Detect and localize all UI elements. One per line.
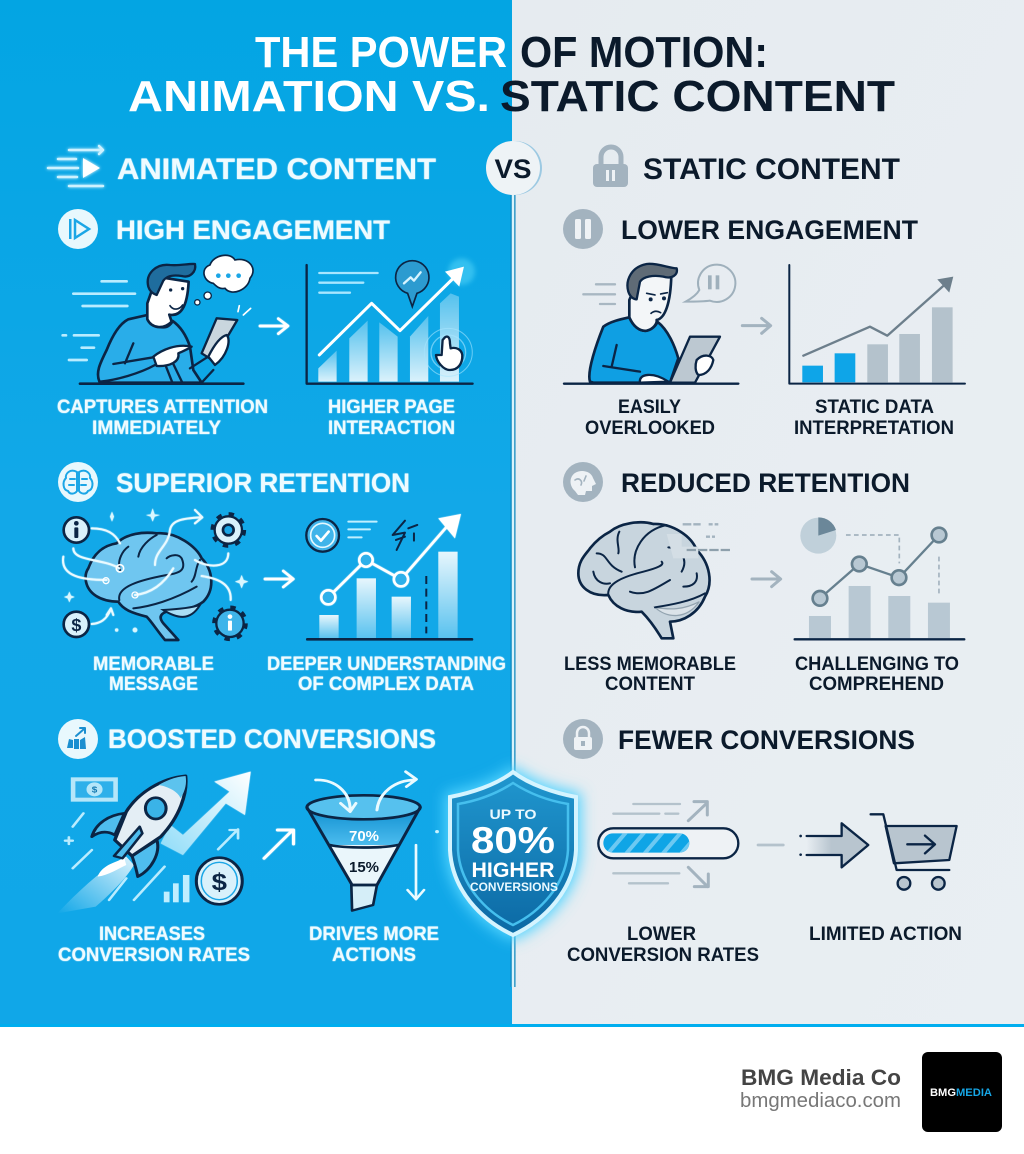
hair bbox=[627, 264, 677, 299]
dashed guides bbox=[846, 535, 939, 597]
arrow bbox=[742, 318, 771, 333]
chart: page interaction bbox=[307, 258, 475, 384]
caption: captures attention bbox=[57, 396, 268, 439]
chart: deeper understanding bbox=[306, 514, 472, 639]
callout: 80% shield bbox=[450, 772, 576, 935]
rocket body bbox=[92, 813, 124, 837]
rising arrow bbox=[161, 772, 251, 855]
caption: increases conversion rates: INCREASES bbox=[99, 923, 205, 945]
caption: higher page interaction bbox=[328, 396, 455, 439]
pointing hand bbox=[153, 346, 192, 366]
section heading: high engagement bbox=[58, 209, 391, 249]
coin bbox=[196, 858, 242, 904]
panel: animated background bbox=[0, 0, 512, 1025]
caption: memorable message: MEMORABLE bbox=[93, 653, 214, 675]
phone bbox=[202, 318, 237, 361]
dollar badge: $ bbox=[71, 615, 81, 635]
illustration: bored person with tablet bbox=[564, 264, 738, 384]
icon: padlock badge bbox=[563, 719, 603, 759]
hand cursor bbox=[436, 337, 462, 370]
chart: static data bbox=[789, 265, 965, 384]
block arrow bbox=[807, 823, 868, 867]
illustration: progress bar bbox=[598, 802, 738, 887]
caption: memorable message: MESSAGE bbox=[109, 673, 198, 695]
cursor rings bbox=[424, 328, 472, 376]
trend line bbox=[803, 281, 949, 356]
title: STATIC CONTENT bbox=[500, 72, 895, 121]
caption: less memorable content: LESS MEMORABLE bbox=[564, 653, 736, 675]
footer brand text bbox=[740, 1065, 901, 1112]
section heading: fewer conversions bbox=[563, 719, 915, 759]
caption: deeper understanding: OF COMPLEX DATA bbox=[298, 673, 474, 695]
coin: $ bbox=[212, 870, 227, 896]
icon: growth badge bbox=[58, 719, 98, 759]
glow bbox=[448, 258, 475, 285]
check badge bbox=[306, 519, 339, 552]
section heading: lower engagement: LOWER ENGAGEMENT bbox=[621, 215, 918, 245]
scribble icon bbox=[393, 521, 417, 550]
section heading: lower engagement bbox=[563, 209, 918, 249]
neck and face bbox=[629, 275, 671, 331]
typing hand bbox=[640, 375, 668, 383]
callout: 80% shield: HIGHER bbox=[472, 859, 554, 882]
fading dashes bbox=[683, 521, 701, 528]
cart bbox=[886, 826, 957, 863]
fade lines bbox=[613, 804, 680, 883]
bars bbox=[319, 552, 458, 638]
caption: less memorable content: CONTENT bbox=[605, 673, 695, 695]
caption: deeper understanding bbox=[267, 653, 506, 695]
callout: 80% shield: UP TO bbox=[490, 806, 537, 822]
dash connector bbox=[758, 841, 783, 849]
arrow bbox=[752, 572, 781, 587]
section heading: superior retention bbox=[58, 462, 410, 502]
arrow bbox=[265, 571, 293, 587]
illustration: arrow into cart bbox=[799, 814, 957, 890]
icon: padlock bbox=[593, 147, 628, 187]
section heading: high engagement: HIGH ENGAGEMENT bbox=[116, 215, 391, 245]
column heading: animated content: ANIMATED CONTENT bbox=[117, 153, 436, 186]
chart: challenging to comprehend bbox=[795, 517, 964, 639]
footer brand text: BMG Media Co bbox=[741, 1065, 901, 1090]
illustration: person with phone bbox=[63, 255, 253, 384]
VS badge bbox=[486, 141, 542, 195]
caption: drives more actions: ACTIONS bbox=[332, 944, 416, 966]
icon: brain badge bbox=[58, 462, 98, 502]
hair bbox=[148, 264, 195, 295]
caption: static data interpretation bbox=[794, 396, 954, 439]
icon: speeding play bbox=[48, 146, 103, 186]
title: ANIMATION VS. bbox=[128, 72, 490, 121]
callout: 80% shield: CONVERSIONS bbox=[470, 880, 558, 894]
info badge bbox=[64, 517, 89, 543]
arrow bbox=[260, 319, 288, 334]
baseline bbox=[307, 635, 472, 643]
pause bubble bbox=[686, 265, 735, 302]
arm lines bbox=[100, 343, 213, 383]
pin icon bbox=[396, 261, 429, 307]
banknote bbox=[71, 777, 118, 802]
caption: lower conversion rates bbox=[567, 923, 759, 966]
desk line bbox=[80, 380, 243, 388]
trend line bbox=[321, 514, 461, 604]
tablet bbox=[670, 337, 720, 383]
caption: static data interpretation: INTERPRETATION bbox=[794, 417, 954, 439]
speed lines bbox=[583, 284, 615, 304]
bars bbox=[809, 586, 950, 638]
bar track bbox=[598, 828, 738, 858]
icon: head badge bbox=[563, 462, 603, 502]
gear icon bbox=[213, 514, 244, 546]
caption: increases conversion rates: CONVERSION RATES bbox=[58, 944, 250, 966]
footer logo: MEDIA bbox=[956, 1087, 992, 1099]
caption: static data interpretation: STATIC DATA bbox=[815, 396, 934, 418]
banknote: $ bbox=[92, 785, 98, 794]
VS badge: VS bbox=[494, 154, 532, 184]
caption: challenging to comprehend: COMPREHEND bbox=[809, 673, 944, 695]
funnel bbox=[307, 772, 439, 911]
axes bbox=[789, 265, 965, 384]
flame bbox=[57, 857, 134, 913]
caption: increases conversion rates bbox=[58, 923, 250, 966]
bars bbox=[318, 293, 459, 382]
dashed marker bbox=[423, 576, 429, 633]
neural paths bbox=[63, 510, 231, 624]
panel: static background bbox=[512, 0, 1024, 1025]
caption: higher page interaction: INTERACTION bbox=[328, 417, 455, 439]
title: THE POWER bbox=[255, 28, 507, 77]
arrow bbox=[264, 830, 294, 858]
section heading: reduced retention bbox=[563, 462, 910, 502]
gear info icon bbox=[214, 608, 246, 639]
sparkles bbox=[64, 508, 248, 632]
text lines bbox=[348, 522, 377, 537]
icon: pause circle bbox=[563, 209, 603, 249]
caption: memorable message bbox=[93, 653, 214, 695]
footer brand text: bmgmediaco.com bbox=[740, 1090, 901, 1112]
desk line bbox=[564, 380, 738, 387]
caption: captures attention: IMMEDIATELY bbox=[92, 417, 221, 439]
mini bars bbox=[164, 875, 189, 902]
section heading: reduced retention: REDUCED RETENTION bbox=[621, 468, 910, 498]
funnel: 15% bbox=[349, 859, 379, 876]
dollar badge bbox=[64, 612, 89, 637]
center divider bbox=[510, 190, 516, 987]
caption: deeper understanding: DEEPER UNDERSTANDING bbox=[267, 653, 506, 675]
bars bbox=[802, 307, 953, 382]
caption: challenging to comprehend bbox=[795, 653, 959, 695]
brain bbox=[86, 533, 211, 640]
thought cloud bbox=[204, 255, 253, 292]
column heading: animated content bbox=[48, 146, 436, 186]
neck and face bbox=[147, 277, 189, 327]
footer logo: BMG bbox=[930, 1087, 956, 1099]
caption: easily overlooked: EASILY bbox=[618, 396, 681, 418]
caption: higher page interaction: HIGHER PAGE bbox=[328, 396, 455, 418]
column heading: static content: STATIC CONTENT bbox=[643, 153, 900, 186]
caption: limited action: LIMITED ACTION bbox=[809, 923, 962, 945]
caption: drives more actions bbox=[309, 923, 439, 966]
footer logo bbox=[922, 1052, 1002, 1132]
title: OF MOTION: bbox=[520, 28, 768, 77]
illustration: grey brain bbox=[578, 522, 731, 638]
trend line bbox=[319, 275, 457, 355]
speed lines bbox=[63, 281, 135, 360]
caption: drives more actions: DRIVES MORE bbox=[309, 923, 439, 945]
caption: lower conversion rates: LOWER bbox=[627, 923, 696, 945]
caption: less memorable content bbox=[564, 653, 736, 695]
text lines bbox=[319, 273, 378, 293]
line with points bbox=[820, 535, 939, 598]
section heading: boosted conversions bbox=[58, 719, 436, 759]
caption: easily overlooked: OVERLOOKED bbox=[585, 417, 715, 439]
callout: 80% shield: 80% bbox=[471, 820, 555, 861]
caption: challenging to comprehend: CHALLENGING TO bbox=[795, 653, 959, 675]
bar fill bbox=[603, 833, 689, 853]
pie icon bbox=[800, 517, 836, 554]
baseline bbox=[795, 636, 964, 643]
funnel: 70% bbox=[349, 828, 379, 845]
fading patch bbox=[667, 534, 698, 558]
icon: play circle bbox=[58, 209, 98, 249]
axes bbox=[307, 265, 473, 384]
caption: lower conversion rates: CONVERSION RATES bbox=[567, 944, 759, 966]
section heading: fewer conversions: FEWER CONVERSIONS bbox=[618, 725, 915, 755]
caption: captures attention: CAPTURES ATTENTION bbox=[57, 396, 268, 418]
section heading: boosted conversions: BOOSTED CONVERSIONS bbox=[108, 724, 436, 754]
title bbox=[128, 28, 895, 121]
column heading: static content bbox=[593, 147, 900, 187]
illustration: rocket bbox=[57, 772, 251, 913]
torso bbox=[589, 317, 678, 383]
bar stripes bbox=[608, 833, 690, 853]
caption: easily overlooked bbox=[585, 396, 715, 439]
speed streaks bbox=[65, 813, 238, 900]
illustration: glowing brain bbox=[63, 508, 248, 640]
torso bbox=[98, 315, 202, 383]
footer band bbox=[0, 1024, 1024, 1154]
section heading: superior retention: SUPERIOR RETENTION bbox=[116, 468, 410, 498]
